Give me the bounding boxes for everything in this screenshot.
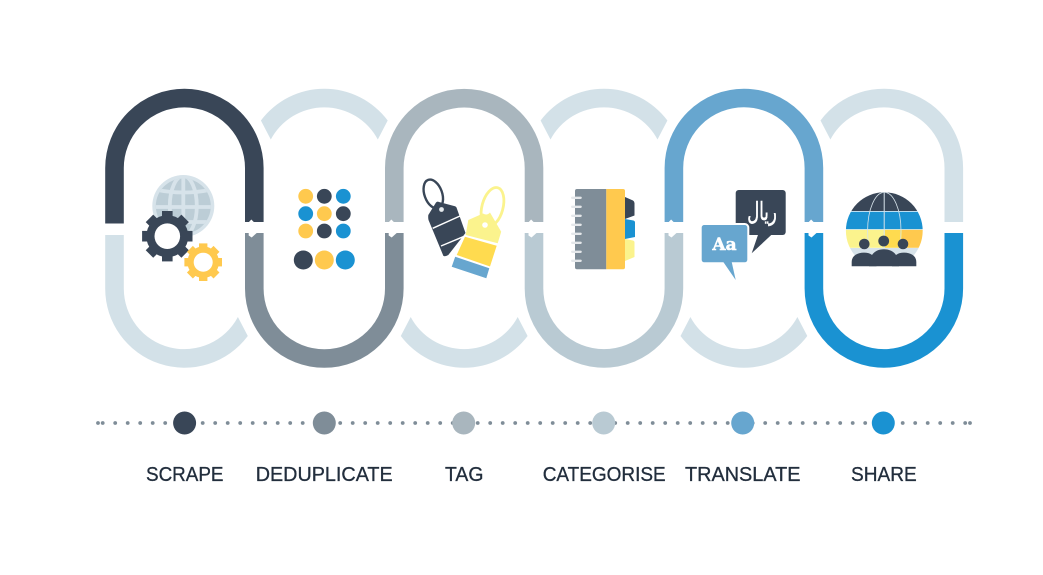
infographic (96, 88, 972, 482)
notebook cover (575, 189, 606, 269)
notebook tabs (625, 197, 635, 261)
ring 5 top: translate (674, 98, 814, 222)
icon: web globe (152, 175, 214, 236)
ring 3 top: tag (394, 98, 534, 222)
people group (852, 236, 916, 266)
dark speech bubble: ريال (747, 196, 777, 226)
step labels: SHARE (851, 463, 917, 486)
ring 2 bottom: deduplicate (254, 233, 394, 358)
timeline markers (173, 412, 895, 434)
step labels: TAG (445, 463, 484, 486)
step labels: TRANSLATE (685, 463, 800, 486)
ring 1 top: scrape (114, 98, 254, 224)
ring 2 top (261, 89, 388, 140)
blue speech bubble: Aa (711, 235, 737, 255)
icon: yellow gear (184, 243, 222, 281)
icon: shared globe with people (845, 192, 925, 270)
joint notches (248, 220, 816, 238)
ring 5 bottom (680, 317, 807, 368)
step labels (146, 463, 917, 486)
icon: notebook (571, 189, 635, 269)
icon: price tags (420, 177, 508, 278)
ring 4 bottom: categorise (534, 233, 674, 358)
step labels: DEDUPLICATE (256, 463, 393, 486)
icon: translation speech bubbles (701, 190, 786, 280)
icon: dark gear (142, 211, 192, 261)
icon: deduplicated dots (294, 189, 355, 270)
ring 3 bottom (401, 317, 528, 368)
ring 6 bottom: share (814, 233, 954, 358)
notebook rings (571, 197, 582, 262)
step labels: SCRAPE (146, 463, 224, 486)
timeline dots (96, 421, 972, 425)
ring 1 bottom (105, 235, 248, 368)
icon: yellow tag (452, 185, 508, 278)
ring 6 top (820, 89, 963, 222)
step labels: CATEGORISE (543, 463, 666, 486)
pipeline ribbon (105, 89, 963, 368)
striped globe (846, 192, 923, 256)
notebook spine (606, 189, 625, 269)
icon: globe and gears (142, 175, 222, 281)
ring 4 top (541, 89, 667, 140)
icon: dark tag (420, 177, 466, 256)
